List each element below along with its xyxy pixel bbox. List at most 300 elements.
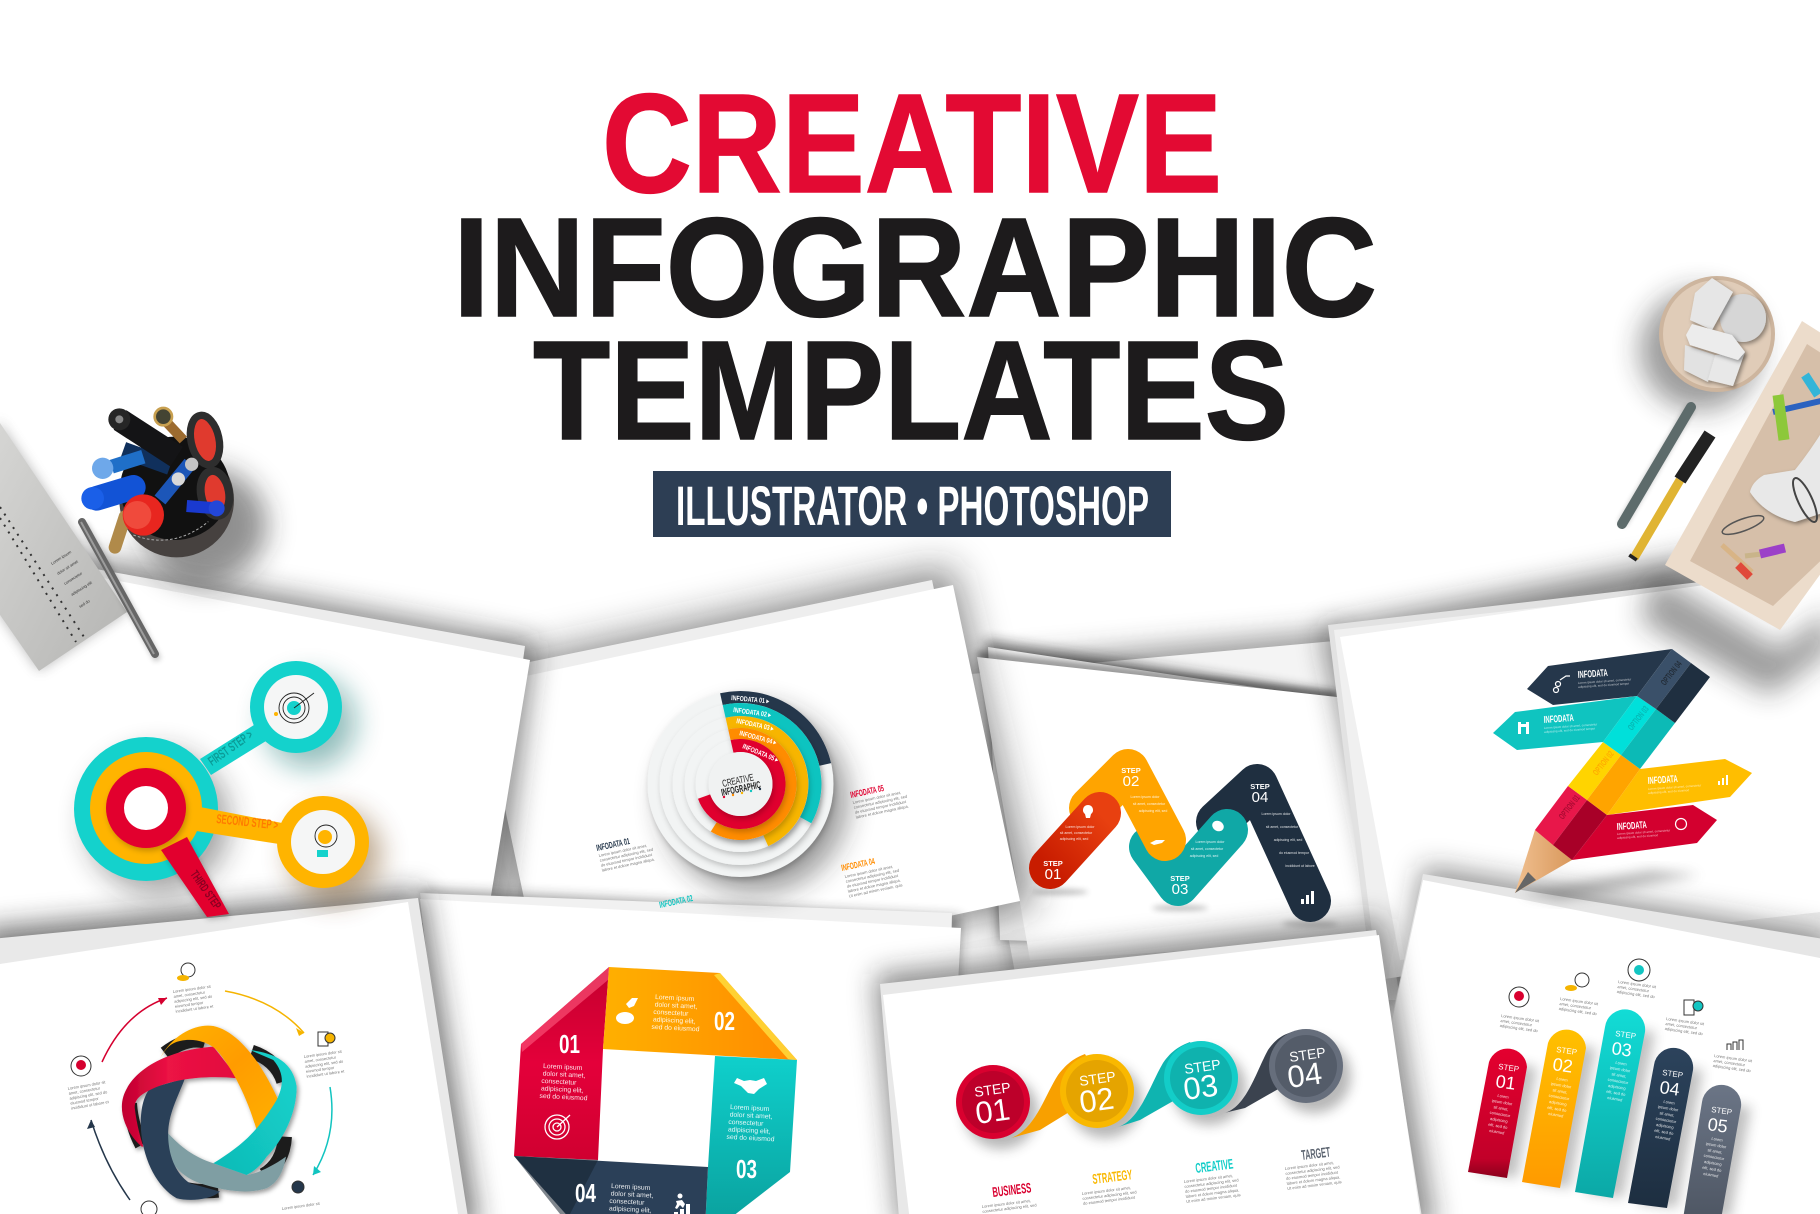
arc: infodata 02 [723,703,821,823]
pencil tip [1515,830,1572,893]
centre disc [708,752,772,816]
panel: spiral steps chart [956,1029,1351,1214]
soft shadow [86,750,230,894]
icon: bulb outline [1676,818,1686,830]
icon: light bulb [315,825,337,857]
label: strategy: Lorem ipsum dolor sit amet, [1082,1185,1131,1196]
captions above bars: Lorem ipsum dolor sit [1714,1053,1753,1063]
bar 03: consectetur [1607,1077,1629,1085]
text: captions: eiusmod tempor [175,1000,204,1009]
badge: illustrator photoshop: ILLUSTRATOR • PHOTOSHOP [676,474,1149,537]
bar 05: eiusmod [1703,1171,1719,1178]
step circle 01 [956,1065,1030,1139]
label: strategy: consectetur adipiscing elit, sed [1082,1189,1137,1201]
label: creative [1184,1155,1241,1204]
white pouch [1750,415,1820,522]
bar shadows [1478,1027,1751,1214]
band text: adipiscing elit, sed [1274,838,1302,842]
icon: two people [1518,722,1529,734]
steel pen [81,522,158,660]
arrow labels [1543,668,1678,833]
arc labels: INFODATA 01 ▸ [731,695,770,705]
bowl with erasers [1659,276,1775,392]
arrow: navy [1527,649,1672,705]
segment texts: adipiscing elit, [653,1016,696,1026]
bar 04: adipiscing [1656,1122,1674,1130]
bar 02: sit amet, [1552,1087,1568,1095]
icon: growth bars [1301,891,1314,904]
bar 02: 02 [1551,1054,1574,1077]
bar 05: Lorem [1711,1136,1724,1143]
step labels: 01 [1045,866,1061,883]
bar 04: 04 [1658,1077,1681,1100]
text block: infodata 01: INFODATA 01 [595,836,631,853]
step circle 03 [1164,1041,1238,1115]
text: captions: eiusmod tempor [70,1096,100,1106]
text block: infodata 05: Lorem ipsum dolor sit amet, [852,790,901,805]
bar 04: elit, sed do [1654,1128,1675,1136]
bar 04: consectetur [1655,1116,1677,1124]
band: red [122,1047,238,1147]
stationery: notebook, pen and pen pot [0,408,267,671]
segment texts [539,994,776,1214]
segment texts: Lorem ipsum [730,1104,770,1113]
arrow labels: INFODATA [1616,820,1647,833]
bar 04: Lorem [1663,1099,1676,1106]
band: grey teal [167,1132,286,1191]
captions above bars: Lorem ipsum dolor sit [1560,996,1599,1006]
segment texts: Lorem ipsum [543,1063,583,1072]
bar 01: eiusmod [1489,1128,1505,1135]
segment: 04 [514,1156,708,1214]
band text: sit amet, consectetur [1060,831,1093,835]
second step label: SECOND STEP > [216,811,279,832]
text: captions: adipiscing elit, sed do [305,1059,344,1069]
arrow heads [87,998,321,1175]
band text: sit amet, consectetur [1133,802,1166,806]
bar 02: ipsum dolor [1550,1081,1572,1090]
text block: infodata 01 [595,836,656,873]
arc labels: INFODATA 02 ▸ [733,707,772,719]
segment texts: consectetur [653,1009,689,1018]
arc: infodata 05 [698,739,786,829]
ribbon 02 to 03 [1118,1042,1210,1127]
centre title: INFOGRAPHIC [720,780,762,799]
pencil segment: option 04 [1637,649,1710,723]
step circle 04 [1269,1029,1343,1103]
paper sheet stack: ring chart [0,890,478,1214]
interwoven knot [122,1026,297,1200]
icon: rings [1554,676,1570,692]
pencil option labels: OPTION 03 [1626,704,1651,732]
bar 03: eiusmod [1607,1095,1623,1102]
text block: infodata 04 [840,856,903,899]
numbers: 02 [714,1006,735,1036]
label: business: Lorem ipsum dolor sit amet, [982,1198,1031,1209]
segment texts: adipiscing elit, [728,1126,771,1136]
label: creative: CREATIVE [1194,1155,1234,1176]
bar 05: consectetur [1703,1153,1725,1161]
panel: octagon chart [514,967,797,1214]
label: target: consectetur adipiscing elit, sed [1285,1164,1340,1176]
third step label: THIRD STEP [188,868,224,912]
label: strategy [1082,1166,1137,1206]
bar 05: ipsum dolor [1705,1141,1727,1150]
black under bands [130,1040,285,1191]
label: creative: Lorem ipsum dolor sit amet, [1184,1173,1233,1184]
centre dots [723,788,761,798]
text block: infodata 04: consectetur adipiscing elit, sed [845,868,900,884]
bar 04: sit amet, [1659,1110,1675,1118]
band text [1060,795,1315,868]
segment texts: consectetur [728,1119,764,1128]
text: captions: Lorem ipsum dolor sit [67,1079,107,1091]
step labels: STEP [1250,782,1270,791]
text block: infodata 01: do eiusmod tempor incididunt [600,852,653,868]
segment texts: Lorem ipsum [611,1183,651,1192]
panel: M shaped steps chart [1032,766,1338,927]
scissor handles [186,413,224,467]
arc labels: INFODATA 03 ▸ [736,718,775,733]
wooden pencil [115,517,125,547]
paper sheet stack: circular chart [466,566,1035,1012]
segment texts: consectetur [609,1198,645,1207]
captions above bars: adipiscing elit, sed do [1664,1026,1704,1036]
bar 03: Lorem [1615,1060,1628,1067]
captions above bars: amet, consectetur [1559,1001,1592,1010]
bar 01: sit amet, [1493,1104,1509,1112]
icon: target [545,1115,570,1139]
band: orange [160,1026,278,1130]
band: teal [213,1050,297,1175]
yellow pen [1632,434,1710,559]
text block: infodata 04: do eiusmod tempor incididunt [846,873,899,889]
icon: handshake [734,1078,767,1094]
grey pen [1622,407,1691,524]
wooden tray [1665,321,1820,630]
band text: Lorem ipsum dolor [1262,812,1291,816]
text: captions: adipiscing elit, sed do [69,1089,108,1101]
text: captions: Lorem ipsum dolor sit [281,1201,321,1211]
plate shadow [662,707,848,893]
blue pens [112,457,143,467]
step labels: STEP [1170,874,1190,883]
text block: infodata 05 [849,783,910,820]
numbers: 03 [736,1154,757,1184]
segment texts: Lorem ipsum [655,994,695,1003]
arc labels [731,695,779,764]
pencil option labels [1557,659,1684,821]
step circle 01: 01 [973,1091,1012,1131]
bar 05: STEP [1711,1105,1733,1117]
step circle 03: STEP [1183,1056,1222,1077]
arrow: red [102,998,167,1062]
segment texts: dolor sit amet, [655,1001,698,1011]
centre title [720,772,762,799]
label: creative: labore et dolore magna aliqua. [1185,1187,1240,1199]
text: captions: incididunt ut labore et [306,1068,345,1079]
arc: infodata 01 [720,691,831,766]
captions above bars: adipiscing elit, sed do [1558,1006,1598,1016]
teal branch [74,661,342,881]
shadow of first step node [264,676,356,768]
stationery: bowl, pens and tray [1622,276,1820,695]
pencils and clips [1773,400,1820,412]
bar 03: elit, sed do [1606,1089,1627,1097]
segment texts: consectetur [541,1078,577,1087]
text: captions: amet, consectetur [68,1085,101,1096]
red branch [106,768,229,917]
icons [545,998,767,1214]
text: captions [67,984,346,1211]
label: target: do eiusmod tempor incididunt [1286,1169,1339,1181]
step labels: 03 [1172,881,1188,898]
arrow body text: adipiscing elit, sed do eiusmod tempor [1544,726,1595,734]
arrow labels: INFODATA [1543,713,1574,726]
segment texts: sed do eiusmod [539,1093,588,1102]
bar 04 [1628,1048,1693,1208]
title [453,64,1377,469]
step labels: 04 [1252,789,1268,806]
text: captions: amet, consectetur [173,989,206,999]
shadow [964,1039,1351,1149]
arrow: red [1572,805,1717,860]
pot shadow [143,467,267,583]
pen pot [81,408,234,557]
text: captions: incididunt ut labore et [71,1099,110,1111]
bowl shadow [1640,290,1760,410]
bar 03 [1575,1009,1645,1198]
segment texts: dolor sit amet, [730,1111,773,1121]
icon: target [274,693,314,723]
text block: infodata 01: consectetur adipiscing elit, sed [599,847,654,863]
segment texts: dolor sit amet, [543,1070,586,1080]
step labels [1043,766,1270,898]
arrow: yellow [225,991,304,1033]
band: step 02 [1090,770,1165,840]
text block: infodata 05: labore et dolore magna aliqua. [855,804,909,820]
bar 05: 05 [1706,1114,1729,1137]
numbers [559,1006,757,1208]
segment: 01 [514,967,609,1160]
bar 03: STEP [1615,1029,1637,1041]
label: business: BUSINESS [991,1179,1032,1200]
label: target: Lorem ipsum dolor sit amet, [1285,1160,1334,1171]
band: step 04 [1217,785,1310,901]
captions above bars: Lorem ipsum dolor sit [1501,1013,1540,1023]
panel: five bars chart [1468,959,1753,1214]
centre title: CREATIVE [721,772,755,790]
bar 01: STEP [1498,1062,1520,1074]
bar 01: 01 [1494,1071,1517,1094]
band icons [1083,805,1314,904]
arc labels: INFODATA 04 ▸ [738,730,777,747]
first step label: FIRST STEP > [205,727,256,768]
icon: handshake [1210,819,1226,833]
panel: interwoven ring chart [67,963,346,1214]
arrow body text: adipiscing elit, sed do eiusmod [1617,833,1658,840]
label: target: Ut enim ad minim veniam, quis [1287,1179,1342,1191]
label: creative: consectetur adipiscing elit, sed [1184,1177,1239,1189]
badge: illustrator photoshop [653,471,1171,537]
segment: 03 [705,1056,797,1214]
label: target: labore et dolore magna aliqua. [1286,1174,1341,1186]
segment texts: sed do eiusmod [726,1134,775,1143]
panel: circular chart [595,691,910,910]
band text: sit amet, consectetur [1191,847,1224,851]
bar 04: eiusmod [1655,1134,1671,1141]
numbers: 04 [575,1178,596,1208]
icons [71,963,335,1214]
fold highlights [514,967,797,1214]
arc labels: INFODATA 05 ▸ [741,743,779,764]
notebook page [0,420,127,671]
captions above bars: Lorem ipsum dolor sit [1618,979,1657,989]
captions above bars: adipiscing elit, sed do [1712,1063,1752,1073]
label: business [982,1179,1037,1214]
paper sheet: five bars chart [1346,866,1820,1214]
text: captions: adipiscing elit, sed do [174,994,213,1004]
step labels: STEP [1043,859,1063,868]
arrow: teal [1493,696,1637,750]
pencil option labels: OPTION 02 [1591,749,1616,777]
paper sheet stack: pencil chart [1322,530,1820,1000]
segment texts: dolor sit amet, [611,1190,654,1200]
title line: creative: CREATIVE [602,64,1222,222]
bar 02: Lorem [1556,1076,1569,1083]
bar 01 [1468,1049,1527,1178]
step circle 02: 02 [1077,1080,1116,1120]
band text: sit amet, consectetur [1266,825,1299,829]
icon: runner and bars [674,1194,690,1214]
label: creative: do eiusmod tempor incididunt [1185,1182,1238,1194]
text block: infodata 05: consectetur adipiscing elit, sed [853,794,908,810]
label: business: consectetur adipiscing elit, sed [982,1202,1037,1214]
label: target: TARGET [1300,1144,1331,1163]
arrow icons [1518,676,1728,830]
text: captions: amet, consectetur [304,1054,337,1064]
ribbon 03 to 04 [1224,1031,1315,1113]
paper sheet stack: three steps chart [0,530,535,950]
text: captions: eiusmod tempor [306,1065,335,1074]
captions above bars: adipiscing elit, sed do [1616,989,1656,999]
captions above bars: amet, consectetur [1617,984,1650,993]
bar 03: ipsum dolor [1609,1065,1631,1074]
icon: hand with coins [1150,840,1165,845]
pencil option labels: OPTION 04 [1659,659,1684,687]
band text: Lorem ipsum dolor [1196,840,1225,844]
notebook page: sed do [78,598,91,609]
band: navy [141,1078,220,1200]
arrow: navy [91,1120,130,1200]
text: captions: Lorem ipsum dolor sit [172,984,212,994]
bar 05 [1682,1085,1741,1214]
paper sheet stack: M chart [960,630,1400,1000]
bar 02: STEP [1556,1045,1578,1057]
red cap [123,494,164,536]
band text: do eiusmod tempor [1279,851,1310,855]
band text: adipiscing elit, sed [1060,837,1088,841]
label: creative: Ut enim ad minim veniam, quis [1186,1192,1241,1204]
notebook page: Lorem ipsum [50,549,73,566]
step labels: STEP [1121,766,1141,775]
pencil segment: option 01 [1535,786,1607,860]
numbers: 01 [559,1029,580,1059]
arrow body text: Lorem ipsum dolor sit amet, consectetur [1648,783,1701,791]
text block: infodata 02: INFODATA 02 [658,893,694,910]
ribbon 01 to 02 [1011,1054,1105,1138]
bar 05: sit amet, [1707,1147,1723,1155]
arrow body text: Lorem ipsum dolor sit amet, consectetur [1578,677,1631,685]
band: step 01 [1050,813,1100,868]
label: target [1285,1144,1342,1191]
shadow of second step node [289,809,381,901]
concentric plates [648,691,834,877]
arrow body text: Lorem ipsum dolor sit amet, consectetur [1617,828,1670,836]
pencil segment: option 03 [1603,696,1675,769]
notebook page: adipiscing elit [70,579,94,597]
arrow: yellow [1607,759,1752,815]
text block: infodata 04: INFODATA 04 [840,856,876,873]
text block: infodata 01: labore et dolore magna aliqua. [601,857,655,873]
arrow labels: INFODATA [1647,774,1678,787]
segment: 02 [603,967,797,1060]
arc: infodata 03 [726,716,808,846]
arc: infodata 04 [711,728,797,840]
text block: infodata 01: Lorem ipsum dolor sit amet, [598,843,647,858]
band text: incididunt ut labore [1285,864,1315,868]
segment texts: adipiscing elit, [541,1085,584,1095]
band: step 03 [1150,830,1227,885]
title line: templates: TEMPLATES [533,311,1289,469]
step circle 04: STEP [1288,1044,1327,1065]
text block: infodata 05: do eiusmod tempor incididunt [854,799,907,815]
bar 02: consectetur [1548,1093,1570,1101]
text block: infodata 04: Ut enim ad minim veniam, quis [848,882,903,899]
bar 03: 03 [1610,1038,1633,1061]
bar 01: consectetur [1489,1110,1511,1118]
step circle 02: STEP [1078,1068,1117,1089]
text block: infodata 05: INFODATA 05 [849,783,885,800]
notebook page: consectetur [63,570,84,586]
yellow branch [90,752,369,888]
tray shadow [1640,575,1820,695]
arrow body text: adipiscing elit, sed do eiusmod [1648,788,1689,795]
bar 03: sit amet, [1611,1071,1627,1079]
captions above bars: Lorem ipsum dolor sit [1666,1016,1705,1026]
bar 05: adipiscing [1704,1159,1722,1167]
bar 05: elit, sed do [1702,1165,1723,1173]
bar 02: elit, sed do [1547,1105,1568,1113]
step circle 01: STEP [973,1079,1012,1100]
captions above bars: amet, consectetur [1713,1058,1746,1067]
bar 01: ipsum dolor [1491,1098,1513,1107]
notebook page: dolor sit amet [56,558,80,576]
dark blue and black pens [123,450,170,467]
pencil option labels: OPTION 01 [1557,793,1582,821]
bar 02: eiusmod [1548,1111,1564,1118]
arrow body text: adipiscing elit, sed do eiusmod tempor [1578,681,1629,689]
text: captions: Lorem ipsum dolor sit [303,1049,343,1059]
label: strategy: STRATEGY [1091,1166,1133,1187]
band text: adipiscing elit, sed [1139,809,1167,813]
arrow body text [1544,677,1702,840]
step circle 03: 03 [1181,1067,1220,1107]
arrow labels: INFODATA [1577,668,1608,681]
band text: Lorem ipsum dolor [1131,795,1160,799]
paper sheet stack: octagon chart [420,889,961,1214]
panel: pencil chart [1493,649,1752,900]
